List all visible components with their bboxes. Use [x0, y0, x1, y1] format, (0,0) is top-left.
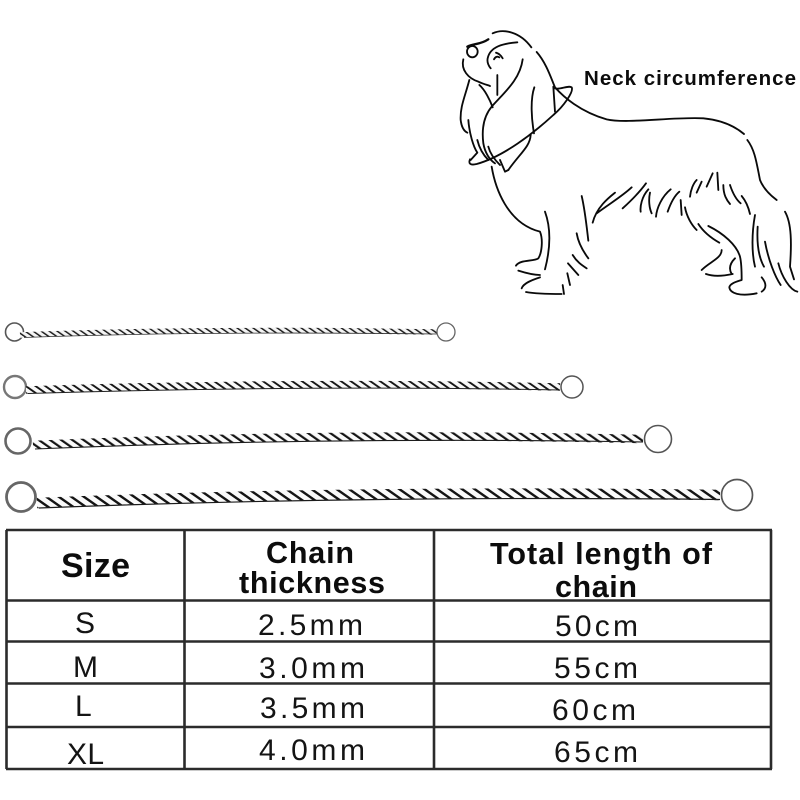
header: chain thickness: Chain: [266, 536, 354, 570]
chain M: [4, 376, 583, 398]
chain L: [6, 426, 672, 454]
header: size: Size: [61, 547, 130, 585]
size table: 2.5mm: [258, 609, 363, 642]
row S: S: [75, 607, 95, 640]
header: total length of chain: Total length of: [490, 537, 713, 571]
size table: 50cm: [555, 610, 638, 643]
size table: [6, 530, 772, 771]
size table: 60cm: [552, 694, 636, 727]
chain S: [6, 323, 455, 341]
size table: 65cm: [554, 736, 638, 769]
table grid: [6, 530, 772, 769]
dog line drawing with neck circumference loop: [461, 31, 797, 295]
size table: 55cm: [554, 652, 638, 685]
size table: thickness: [239, 566, 385, 600]
label: neck circumference: Neck circumference: [584, 67, 796, 90]
size table: chain: [555, 570, 637, 604]
row M: M: [73, 651, 98, 684]
size table: 3.5mm: [260, 692, 365, 725]
row XL: XL: [67, 738, 104, 771]
size table: 4.0mm: [259, 734, 365, 767]
chain XL: [6, 480, 752, 512]
size table: 3.0mm: [259, 652, 365, 685]
row L: L: [75, 690, 92, 723]
